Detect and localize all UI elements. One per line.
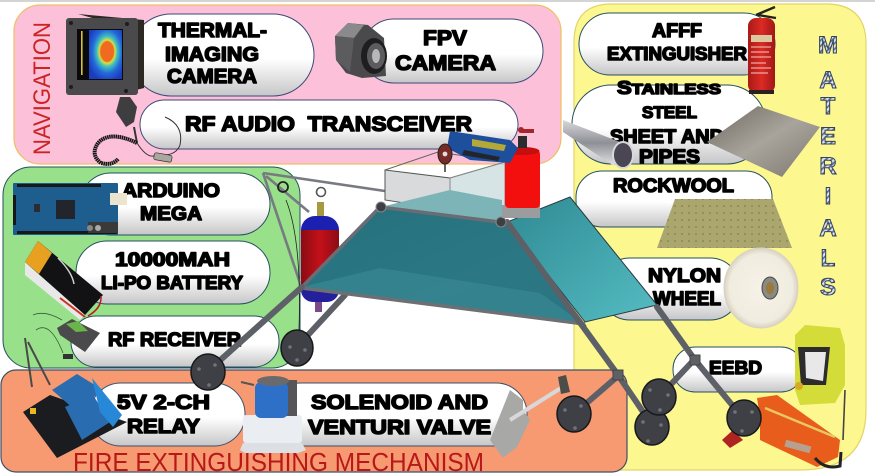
label: Arduino Mega: MEGA	[140, 204, 202, 225]
label: AFFF extinguisher: EXTINGUISHER	[607, 44, 747, 64]
label: Arduino Mega: ARDUINO	[122, 181, 220, 202]
panel: electronics	[3, 167, 300, 368]
label: 5V 2-channel relay	[90, 383, 245, 446]
heading: materials: R	[819, 153, 837, 180]
heading: materials: A	[819, 67, 837, 94]
panel: fire extinguishing mechanism	[1, 370, 627, 472]
heading: materials: M	[818, 32, 838, 59]
label: stainless steel sheet and pipes: SHEET AND	[610, 127, 724, 148]
label: FPV camera: FPV	[423, 27, 467, 50]
label: nylon wheel	[600, 258, 740, 320]
panel: materials	[574, 4, 866, 470]
label: stainless steel sheet and pipes: STEEL	[642, 103, 697, 122]
label: EEBD: EEBD	[709, 358, 762, 378]
robot: front panel lower strip	[302, 268, 585, 325]
heading: navigation: NAVIGATION	[29, 22, 56, 155]
label: FPV camera	[362, 19, 543, 83]
icon: relay module	[23, 374, 127, 458]
label: EEBD	[673, 347, 803, 392]
label: nylon wheel: WHEEL	[653, 289, 721, 310]
panel: navigation	[14, 5, 561, 164]
heading: materials: I	[825, 183, 831, 210]
label: solenoid and venturi valve: SOLENOID AND	[311, 392, 488, 414]
icon: stainless steel sheet	[707, 106, 820, 177]
label: AFFF extinguisher	[579, 13, 775, 75]
label: FPV camera: CAMERA	[395, 52, 496, 75]
label: 5V 2-channel relay: RELAY	[127, 416, 201, 438]
icon: venturi valve	[490, 375, 570, 458]
robot: front teal panel	[302, 207, 585, 325]
label: RF receiver: RF RECEIVER	[108, 330, 241, 351]
heading: materials: S	[820, 274, 836, 301]
heading: materials: A	[819, 215, 837, 242]
icon: FPV camera	[335, 23, 387, 78]
label: 10000mAh Li-Po battery	[76, 241, 270, 304]
icon: EEBD hood and bag	[722, 325, 845, 467]
label: solenoid and venturi valve	[270, 383, 527, 446]
icon: rockwool slab	[657, 199, 792, 248]
heading: materials	[818, 32, 838, 301]
robot: glass box	[385, 152, 505, 222]
icon: stainless steel pipe	[563, 120, 633, 168]
label: stainless steel sheet and pipes: PIPES	[639, 147, 700, 168]
robot: support rods	[263, 173, 385, 330]
label: thermal-imaging camera: CAMERA	[167, 66, 257, 88]
icon: Li-Po battery	[25, 241, 103, 320]
icon: RF microphone and cable	[95, 97, 181, 164]
robot: rear legs	[296, 295, 692, 414]
label: rockwool	[576, 171, 772, 227]
heading: materials: E	[820, 123, 836, 150]
icon: Arduino Mega	[13, 183, 127, 235]
robot: frame joints	[376, 202, 700, 380]
icon: thermal camera	[66, 14, 144, 95]
label: Arduino Mega	[80, 173, 270, 235]
robot: front legs	[207, 222, 742, 425]
robot: right teal panel	[507, 197, 657, 322]
robot: blue nozzle assembly	[438, 131, 518, 172]
icon: fire extinguisher	[748, 7, 776, 94]
label: 5V 2-channel relay: 5V 2-CH	[117, 392, 210, 414]
robot: hanging cylinder	[301, 188, 339, 312]
icon: solenoid valve	[240, 376, 306, 453]
label: 10000mAh Li-Po battery: 10000MAH	[115, 250, 230, 271]
robot: frame tubes	[302, 207, 585, 324]
robot: wheels	[191, 330, 761, 445]
robot: chassis and wheels	[191, 127, 761, 445]
label: RF receiver	[71, 316, 279, 367]
heading: materials: T	[821, 93, 836, 120]
label: AFFF extinguisher: AFFF	[652, 21, 702, 42]
label: RF audio transceiver: RF AUDIO TRANSCEIVER	[185, 113, 472, 136]
label: thermal-imaging camera: IMAGING	[165, 44, 259, 66]
icon: RF receiver	[25, 313, 100, 387]
icon: nylon wheel	[724, 248, 798, 328]
label: thermal-imaging camera: THERMAL-	[158, 20, 267, 42]
label: thermal-imaging camera	[130, 14, 314, 96]
label: stainless steel sheet and pipes: STAINLESS	[617, 78, 721, 98]
label: nylon wheel: NYLON	[648, 266, 721, 287]
label: RF audio transceiver	[140, 100, 518, 149]
label: rockwool: ROCKWOOL	[613, 176, 734, 197]
robot: red extinguisher tank	[502, 127, 540, 218]
heading: materials: L	[821, 245, 835, 272]
label: 10000mAh Li-Po battery: LI-PO BATTERY	[101, 273, 243, 293]
label: solenoid and venturi valve: VENTURI VALVE	[308, 417, 491, 439]
label: stainless steel sheet and pipes	[572, 78, 766, 168]
